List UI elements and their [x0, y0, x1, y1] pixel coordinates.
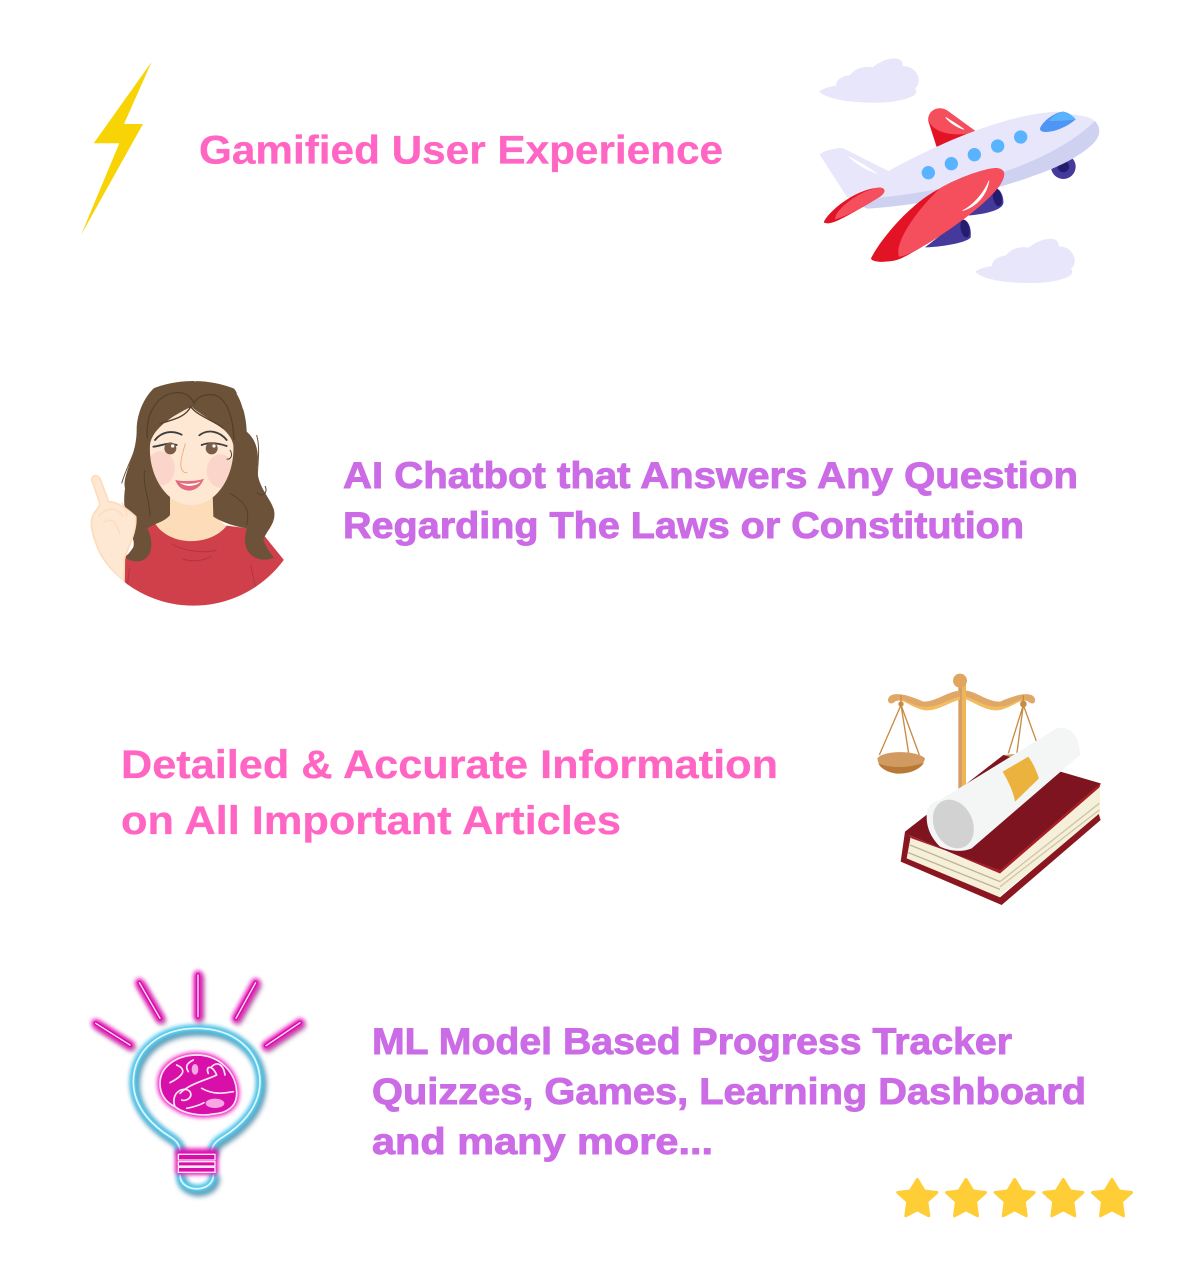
- panel: detailed information: [121, 674, 1101, 905]
- panel: progress tracker: [96, 975, 1132, 1216]
- heading: progress tracker: [372, 1021, 1086, 1162]
- heading: detailed information: on All Important Articles: [121, 799, 621, 843]
- heading: detailed information: Detailed & Accurate Information: [121, 743, 778, 787]
- panel: gamified user experience: [81, 59, 1099, 283]
- heading: AI chatbot: [343, 455, 1078, 546]
- heading: AI chatbot: Regarding The Laws or Constitution: [343, 505, 1024, 546]
- heading: detailed information: [121, 743, 778, 843]
- icon: scales, law book and scroll: [877, 674, 1101, 905]
- panel: AI chatbot: [91, 376, 1078, 613]
- icon: neon light bulb with brain: [96, 975, 302, 1192]
- heading: AI chatbot: AI Chatbot that Answers Any Question: [343, 455, 1078, 496]
- icon: woman pointing finger: [91, 376, 287, 613]
- icon: five star rating: [898, 1180, 1132, 1216]
- icon: airplane with clouds: [819, 59, 1099, 283]
- icon: lightning bolt: [81, 62, 152, 235]
- heading: progress tracker: and many more...: [372, 1121, 713, 1162]
- heading: progress tracker: ML Model Based Progress Tracker: [372, 1021, 1012, 1062]
- heading: gamified user experience: Gamified User Experience: [199, 128, 723, 172]
- heading: progress tracker: Quizzes, Games, Learning Dashboard: [372, 1071, 1086, 1112]
